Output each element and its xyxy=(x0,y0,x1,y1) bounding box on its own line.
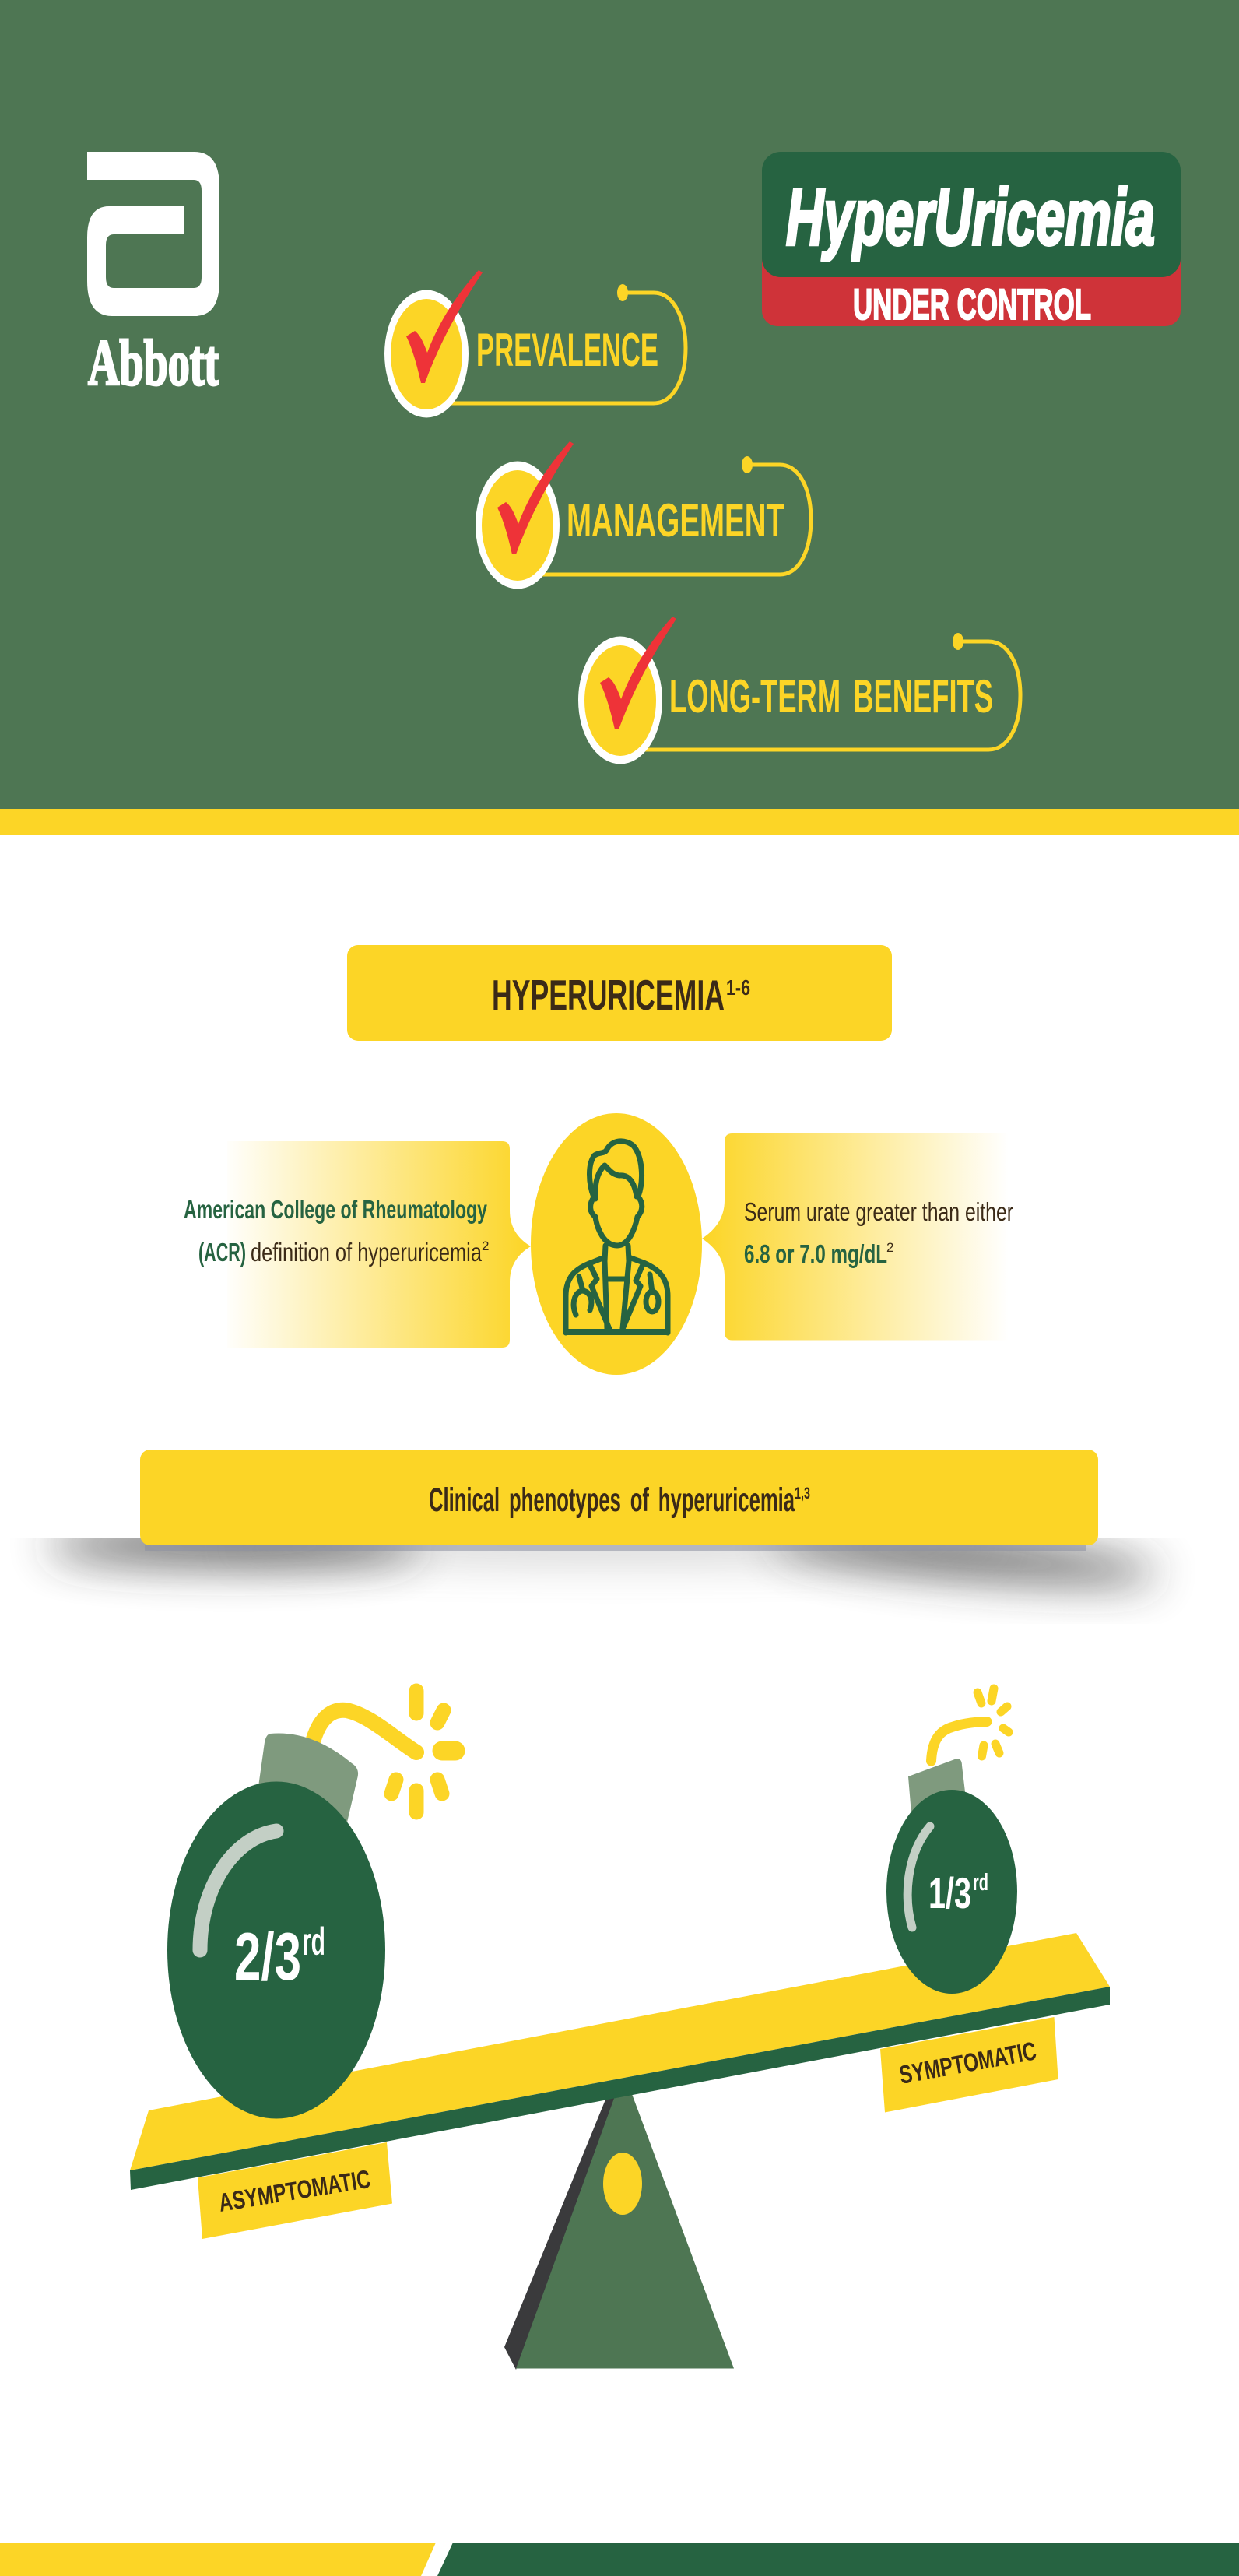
panel: serum urate: Serum urate greater than either xyxy=(744,1197,1013,1226)
bomb: 1/3rd symptomatic xyxy=(886,1689,1017,1994)
Abbott logo: Abbott xyxy=(88,327,219,399)
panel: ACR definition: American College of Rheumatology xyxy=(184,1195,487,1224)
heading: clinical phenotypes xyxy=(140,1450,1098,1545)
bomb: 2/3rd asymptomatic: rd xyxy=(302,1920,325,1963)
checklist item: prevalence: PREVALENCE xyxy=(476,324,658,376)
label: symptomatic xyxy=(880,2017,1058,2113)
panel: serum urate: 2 xyxy=(886,1240,893,1255)
Abbott logo xyxy=(87,152,219,399)
bomb: 2/3rd asymptomatic: 2/3 xyxy=(234,1920,301,1994)
heading: clinical phenotypes: 1,3 xyxy=(795,1485,810,1502)
seesaw fulcrum xyxy=(504,2094,734,2370)
panel: ACR definition xyxy=(184,1141,531,1348)
bomb: 1/3rd symptomatic: rd xyxy=(973,1868,988,1896)
checklist item: long-term benefits xyxy=(578,617,1020,764)
heading: hyperuricemia: HYPERURICEMIA xyxy=(492,971,725,1019)
checklist item: management: MANAGEMENT xyxy=(567,494,784,546)
checklist item: long-term benefits: LONG-TERM BENEFITS xyxy=(669,670,993,722)
HyperUricemia badge: UNDER CONTROL xyxy=(853,279,1091,329)
seesaw plank xyxy=(130,1933,1110,2190)
panel: serum urate: 6.8 or 7.0 mg/dL xyxy=(744,1239,887,1268)
heading: hyperuricemia: 1-6 xyxy=(726,975,750,1000)
panel: serum urate xyxy=(702,1133,1013,1341)
panel: ACR definition: definition of hyperuricemia xyxy=(251,1238,482,1267)
HyperUricemia badge xyxy=(762,152,1181,329)
icon: doctor in circle xyxy=(531,1113,702,1375)
bomb: 2/3rd asymptomatic xyxy=(167,1691,455,2119)
panel: ACR definition: (ACR) xyxy=(198,1238,246,1267)
header panel xyxy=(0,0,1239,835)
heading: clinical phenotypes: Clinical phenotypes of hyperuricemia xyxy=(429,1481,795,1519)
footer bars xyxy=(0,2543,1239,2576)
label: asymptomatic: ASYMPTOMATIC xyxy=(216,2164,373,2217)
bar shadow xyxy=(47,1521,1160,1593)
checklist item: prevalence xyxy=(384,270,686,417)
panel: ACR definition: 2 xyxy=(482,1239,489,1253)
label: asymptomatic xyxy=(198,2142,392,2239)
checklist item: management xyxy=(476,441,811,589)
heading: hyperuricemia xyxy=(347,945,892,1041)
bomb: 1/3rd symptomatic: 1/3 xyxy=(928,1868,971,1917)
label: symptomatic: SYMPTOMATIC xyxy=(897,2036,1038,2089)
